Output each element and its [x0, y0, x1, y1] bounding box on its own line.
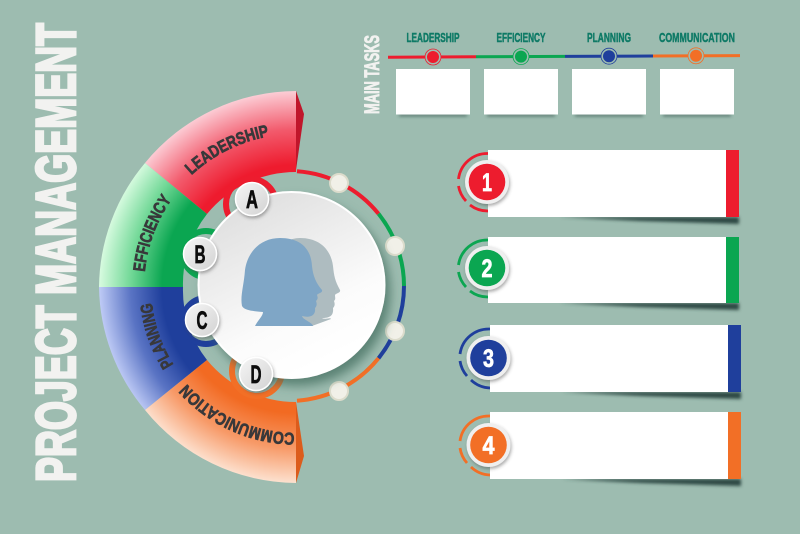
- timeline markers: [425, 48, 704, 65]
- letters: [194, 186, 262, 389]
- wedge: leadership: [145, 91, 296, 214]
- card 1: 1: [482, 169, 492, 197]
- task labels: COMMUNICATION: [659, 31, 735, 45]
- letters: C: [196, 307, 208, 335]
- letter rings: [183, 179, 282, 396]
- wedge labels: EFFICIENCY: [132, 192, 170, 272]
- semicircular wedge diagram: [99, 91, 406, 483]
- letter discs: [184, 182, 272, 390]
- wedge fold: communication: [296, 402, 304, 483]
- card 1: [458, 150, 739, 224]
- wedge: efficiency: [99, 163, 207, 287]
- timeline line: [388, 56, 740, 57]
- card 3: 3: [483, 345, 494, 373]
- card 2: 2: [482, 255, 492, 283]
- letters: D: [250, 361, 262, 389]
- wedge labels: COMMUNICATION: [178, 384, 294, 445]
- wedge labels: PLANNING: [140, 304, 174, 370]
- letters: A: [246, 186, 258, 214]
- wedge fold: leadership: [296, 91, 304, 170]
- card 2: [458, 237, 739, 310]
- wedge labels: LEADERSHIP: [184, 125, 268, 175]
- task labels: PLANNING: [587, 31, 631, 45]
- card 4: [460, 412, 741, 486]
- task boxes: [396, 69, 734, 116]
- main tasks timeline: [361, 31, 740, 116]
- card 4: 4: [482, 432, 495, 460]
- task labels: EFFICIENCY: [496, 31, 546, 45]
- task labels: [406, 31, 735, 45]
- letters: B: [194, 241, 206, 269]
- card 3: [460, 325, 741, 399]
- task labels: LEADERSHIP: [406, 31, 460, 45]
- centre disc: [198, 192, 384, 378]
- ring markers: [330, 174, 404, 400]
- wedge: planning: [99, 287, 207, 410]
- icon: heads: [241, 238, 340, 326]
- outer ring: [297, 171, 404, 401]
- wedge: communication: [145, 360, 296, 483]
- wedge labels: [132, 125, 294, 445]
